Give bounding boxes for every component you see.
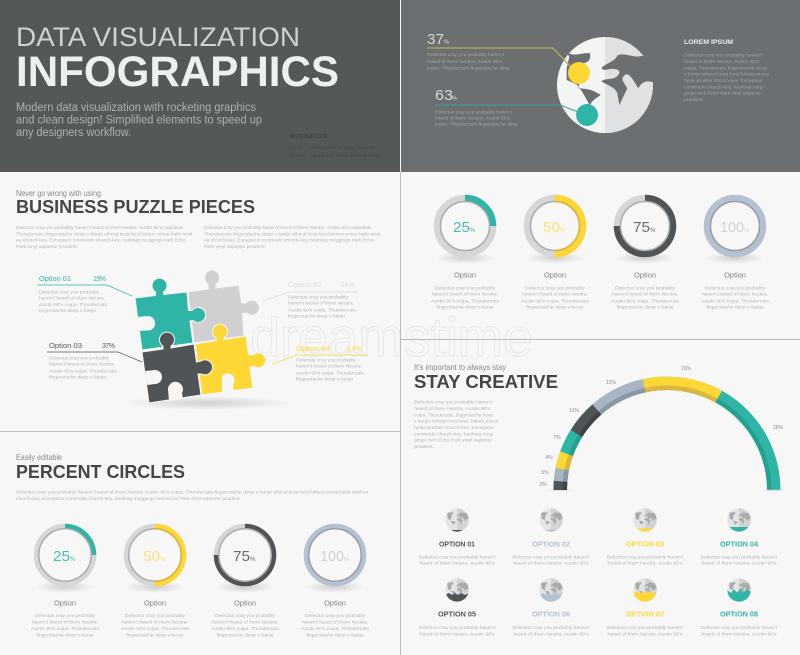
- option 02: heard of them Neutra. Austin 90's: [514, 560, 589, 566]
- option 07: [606, 578, 684, 636]
- gauge: 100%: [701, 198, 770, 310]
- option 01: heard of them Neutra. Austin 90's: [420, 560, 495, 566]
- heading: BUSINESS PUZZLE PIECES: [16, 196, 255, 217]
- body text: v banjo ethical trust fund, bitters ennui: [414, 418, 498, 424]
- intro paragraph: Modern data visualization with rocketing graphics: [16, 102, 256, 114]
- gauge: 100%: %: [344, 557, 350, 563]
- callout: option 02: 34%: [340, 282, 355, 289]
- title line two: INFOGRAPHICS: [16, 48, 339, 96]
- gauge: 25%: fingerstache deep v banjo: [36, 632, 94, 638]
- puzzle piece: dark: [142, 332, 212, 403]
- gauge: 100%: fingerstache deep v banjo: [306, 632, 364, 638]
- gauge: 50%: 50: [143, 548, 160, 565]
- gauge: 75%: %: [250, 557, 256, 563]
- arc labels: 11%: [569, 408, 579, 414]
- panel: percent circles: [16, 452, 370, 638]
- option 07: heard of them Neutra. Austin 90's: [608, 632, 683, 636]
- option 06: Delectus cray you probably haven't: [512, 625, 590, 630]
- gauge: 100%: Delectus cray you probably: [705, 286, 766, 290]
- gauge: 25%: Option: [454, 270, 476, 280]
- gauge: 25%: haven't heard of them Neutra.: [432, 292, 498, 296]
- option 05: [418, 578, 496, 636]
- gauge: 50%: Delectus cray you probably: [125, 613, 186, 618]
- stat: 63%: [435, 87, 518, 126]
- heading: PERCENT CIRCLES: [16, 461, 185, 482]
- panel: top right percent circles: [431, 198, 770, 310]
- callout: option 04: [272, 344, 368, 382]
- gauge: 75%: fingerstache deep v banjo: [216, 632, 274, 638]
- puzzle graphic: [135, 270, 266, 403]
- gauge: 100%: fingerstache deep v banjo: [706, 304, 764, 310]
- arc labels: 4%: [545, 455, 553, 461]
- gauge: 75%: Austin 90's cuipa. Thundercats: [611, 298, 680, 304]
- option 08: heard of them Neutra. Austin 90's: [702, 632, 777, 636]
- lorem ipsum text block: culpa. Thundercats fingerstache deep: [684, 66, 767, 70]
- option 02: Delectus cray you probably haven't: [512, 554, 590, 560]
- callout: option 01: [37, 274, 132, 313]
- gauge: 50%: Austin 90's cuipa. Thundercats: [521, 298, 590, 304]
- gauge: 75%: fingerstache deep v banjo: [616, 304, 674, 310]
- panel: stay creative: [414, 362, 788, 636]
- gauge: 50%: haven't heard of them Neutra.: [522, 292, 588, 296]
- stat: 63%: 63: [435, 87, 453, 104]
- gauge: 50%: [121, 526, 190, 638]
- kicker: It's important to always stay: [414, 362, 507, 372]
- gauge: 50%: haven't heard of them Neutra.: [122, 620, 188, 624]
- callout: option 01: fingerstache deep v banjo: [39, 308, 96, 313]
- gauge: 75%: Delectus cray you probably: [615, 286, 676, 290]
- option 05: OPTION 05: [438, 612, 476, 618]
- option 03: heard of them Neutra. Austin 90's: [608, 560, 683, 566]
- resources note: FONT:: [290, 145, 303, 150]
- gauge: 25%: [431, 198, 500, 310]
- puzzle piece: teal: [135, 278, 206, 350]
- callout: option 02: Austin 90's cuipa. Thundercats: [288, 308, 357, 312]
- option 06: OPTION 06: [532, 612, 570, 618]
- gauge: 100%: Option: [324, 598, 346, 608]
- shadows under arc feet: [546, 488, 788, 492]
- gauge: 100%: 100: [720, 219, 744, 236]
- intro column two: Delectus cray you probably haven't heard of them Neutra. Austin 90's cupidatat.: [204, 225, 372, 230]
- body text: cuipa. Thundercats, fingerstache deep: [414, 412, 493, 418]
- gauge: 25%: Austin 90's cuipa. Thundercats: [31, 626, 100, 631]
- gauge: 100%: Austin 90's cuipa. Thundercats: [701, 298, 770, 304]
- callout: option 04: haven't heard of them Neutra.: [296, 364, 362, 368]
- body text: Delectus cray you probably haven't: [414, 400, 493, 404]
- option 08: [700, 578, 778, 636]
- gauge: 25%: %: [70, 557, 76, 563]
- gauge: 100%: Austin 90's cuipa. Thundercats: [301, 626, 370, 631]
- intro column one: Delectus cray you probably haven't heard of them Neutra. Austin 90's cupidatat.: [16, 225, 184, 230]
- resources note: Gotham, Lato, Raleway, Font Face: [311, 145, 375, 150]
- callout: option 02: Option 02: [288, 280, 322, 289]
- intro text: church-key. Excepteur commodo church-key, hashtag meggings meh Echo Park vinyl sapiente proident.: [16, 496, 241, 501]
- option 01: OPTION 01: [439, 542, 475, 548]
- lorem ipsum text block: proident.: [684, 97, 704, 102]
- body text: commodo church-key, hashtag meg-: [414, 432, 494, 436]
- stat: 37%: Delectus cray you probably haven't: [427, 52, 505, 57]
- pointer line: 63%: [435, 105, 586, 115]
- callout: option 04: fingerstache deep v banjo: [296, 376, 353, 382]
- kicker: Easily editable: [16, 452, 62, 462]
- callout: option 02: fingerstache deep v banjo: [288, 314, 345, 318]
- gauge: 75%: %: [650, 228, 656, 234]
- icon: globe: [557, 37, 657, 133]
- callout: option 03: haven't heard of them Neutra.: [49, 362, 115, 366]
- panel: header title: [0, 0, 400, 172]
- gauge: 75%: Austin 90's cuipa. Thundercats: [211, 626, 280, 631]
- callout: option 02: [263, 280, 357, 318]
- pointer line: 37%: [427, 48, 571, 67]
- arc labels: [539, 366, 784, 488]
- arc labels: 12%: [606, 380, 617, 386]
- body text: heard of them Neutra. Austin 90's: [414, 406, 491, 411]
- intro column two: [204, 225, 380, 249]
- option 04: heard of them Neutra. Austin 90's: [702, 560, 777, 566]
- gauge: 25%: haven't heard of them Neutra.: [32, 620, 98, 624]
- intro paragraph: any designers workflow.: [16, 127, 131, 139]
- gauge: 100%: haven't heard of them Neutra.: [702, 292, 768, 296]
- gauge: 100%: 100: [320, 548, 344, 565]
- stat: 63%: %: [452, 96, 458, 102]
- resources note: RESOURCES:: [290, 134, 329, 140]
- intro paragraph: [16, 102, 262, 139]
- gauge: 75%: Option: [234, 598, 256, 608]
- heading: STAY CREATIVE: [414, 371, 558, 392]
- callout: option 04: Austin 90's cuipa. Thundercats: [296, 370, 365, 376]
- stat: 37%: heard of them Neutra. Austin 90's: [427, 59, 503, 64]
- callout: option 03: Option 03: [49, 341, 82, 350]
- puzzle piece: gray: [188, 270, 259, 343]
- resources note: [290, 134, 383, 158]
- callout: option 01: Option 01: [39, 274, 71, 283]
- option 04: OPTION 04: [720, 542, 758, 548]
- stat: 63%: cuipa. Thundercats fingerstache deep: [435, 122, 518, 126]
- gauge: 25%: Delectus cray you probably: [435, 286, 496, 290]
- gauge: 25%: %: [470, 228, 476, 234]
- arc labels: 7%: [553, 435, 561, 441]
- intro column one: ea church-key. Excepteur commodo church-key, hashtag meggings meh Echo: [16, 238, 186, 242]
- gauge: 50%: Delectus cray you probably: [525, 286, 586, 290]
- body text: proident.: [414, 444, 434, 449]
- callout: option 04: Delectus cray you probably: [296, 358, 357, 362]
- callout: option 03: Austin 90's cuipa. Thundercats: [49, 368, 118, 374]
- stat: 37%: [427, 31, 510, 70]
- gauge: 75%: 75: [633, 219, 650, 236]
- semicircle chart: [558, 381, 776, 490]
- option 02: [512, 508, 590, 566]
- intro column one: Thundercats fingerstache deep v banjo ethical trust fund bitters ennui hello viral: [16, 232, 192, 236]
- gauge: 75%: [611, 198, 680, 310]
- intro text: Delectus cray you probably haven't heard of them Neutra. Austin 90's cuipa. Thundercats fingerstache deep v banjo ethical trust fund bitters ennui hello viral ea: [16, 490, 368, 494]
- callout: option 01: haven't heard of them Neutra.: [39, 296, 105, 300]
- gauge: 100%: Delectus cray you probably: [305, 613, 366, 618]
- option 01: Delectus cray you probably haven't: [418, 554, 496, 560]
- stat: 37%: 37: [427, 31, 444, 48]
- resources note: Vector Flat, Clean Minimal Design: [311, 153, 383, 158]
- option 04: [700, 508, 778, 566]
- option 07: OPTION 07: [626, 612, 664, 618]
- intro column two: Park vinyl sapiente proident.: [204, 244, 266, 249]
- gauge: 50%: fingerstache deep v banjo: [526, 304, 584, 310]
- intro paragraph: and clean design! Simplified elements to speed up: [16, 114, 262, 126]
- callout: option 03: 37%: [102, 343, 115, 350]
- intro column one: Park vinyl sapiente proident.: [16, 244, 78, 249]
- gauge: 75%: haven't heard of them Neutra.: [212, 620, 278, 624]
- option 06: [512, 578, 590, 636]
- stat: 63%: Delectus cray you probably haven't: [435, 110, 513, 114]
- callout: option 02: haven't heard of them Neutra.: [288, 300, 354, 306]
- gauge: 100%: Option: [724, 270, 746, 280]
- callout: option 02: Delectus cray you probably: [288, 294, 349, 300]
- callout: option 01: Delectus cray you probably: [39, 290, 100, 294]
- panel: business puzzle pieces: [16, 188, 380, 410]
- stat: 63%: heard of them Neutra. Austin 90's: [435, 116, 511, 120]
- lorem ipsum text block: [684, 39, 769, 102]
- gauge: 100%: haven't heard of them Neutra.: [302, 620, 368, 624]
- callout: option 03: fingerstache deep v banjo: [49, 374, 106, 380]
- kicker: Never go wrong with using: [16, 188, 101, 198]
- callout: option 01: 15%: [93, 276, 106, 283]
- watermark: dreamstime: [250, 306, 533, 368]
- lorem ipsum text block: LOREM IPSUM: [684, 39, 733, 46]
- arc segment: outer band: [558, 381, 776, 490]
- option 03: OPTION 03: [626, 542, 664, 548]
- gauge: 100%: %: [744, 228, 750, 234]
- puzzle piece: yellow: [195, 324, 266, 395]
- arc labels: 16%: [681, 366, 692, 372]
- intro column two: Thundercats fingerstache deep v banjo ethical trust fund bitters ennui hello viral: [204, 232, 380, 236]
- gauge: 25%: fingerstache deep v banjo: [436, 304, 494, 310]
- resources note: STYLE:: [290, 153, 304, 158]
- arc labels: 5%: [541, 470, 549, 476]
- gauge: 25%: [31, 526, 100, 638]
- gauge: 25%: 25: [53, 548, 70, 565]
- gauge: 75%: 75: [233, 548, 250, 565]
- gauge: 25%: Austin 90's cuipa. Thundercats: [431, 298, 500, 304]
- gauge: 50%: Austin 90's cuipa. Thundercats: [121, 626, 190, 631]
- option 03: Delectus cray you probably haven't: [606, 554, 684, 560]
- gauge: 100%: [301, 526, 370, 638]
- gauge: 25%: Option: [54, 598, 76, 608]
- body text: hello another church-key. Excepteur: [414, 425, 494, 430]
- gauge: 50%: Option: [544, 270, 566, 280]
- marker: yellow: [568, 62, 590, 84]
- arc labels: 2%: [539, 482, 547, 488]
- gauge: 50%: 50: [543, 219, 560, 236]
- stat: 37%: %: [444, 40, 450, 46]
- lorem ipsum text block: v banjo ethical trust fund bitters ennui: [684, 72, 769, 76]
- option 03: [606, 508, 684, 566]
- option 06: heard of them Neutra. Austin 90's: [514, 632, 589, 636]
- intro column two: ea church-key. Excepteur commodo church-key, hashtag meggings meh Echo: [204, 238, 374, 242]
- callout: option 04: 14%: [347, 346, 362, 353]
- body text: gings meh Echo Park vinyl sapiente: [414, 438, 492, 442]
- gauge: 75%: Option: [634, 270, 656, 280]
- marker: teal: [576, 104, 598, 126]
- option 08: OPTION 08: [720, 612, 758, 618]
- option 07: Delectus cray you probably haven't: [606, 625, 684, 630]
- gauge: 50%: Option: [144, 598, 166, 608]
- option 05: heard of them Neutra. Austin 90's: [420, 632, 495, 636]
- gauge: 50%: %: [560, 228, 566, 234]
- gauge: 50%: %: [160, 557, 166, 563]
- lorem ipsum text block: commodo church-key, hashtag meg-: [684, 84, 764, 90]
- gauge: 50%: fingerstache deep v banjo: [126, 632, 184, 638]
- callout: option 04: Option 04: [296, 344, 330, 353]
- stat: 37%: cuipa. Thundercats fingerstache deep: [427, 66, 510, 70]
- lorem ipsum text block: Delectus cray you probably haven't: [684, 52, 763, 58]
- callout: option 03: Delectus cray you probably: [49, 356, 110, 360]
- option 02: OPTION 02: [532, 542, 570, 548]
- lorem ipsum text block: gings meh Echo Park vinyl sapiente: [684, 90, 761, 96]
- shadow under puzzle: [122, 396, 292, 410]
- arc labels: 26%: [773, 425, 784, 431]
- gauge: 50%: [521, 198, 590, 310]
- option 04: Delectus cray you probably haven't: [700, 554, 778, 560]
- panel: world stats: [401, 0, 800, 172]
- intro column one: [16, 225, 192, 249]
- option 01: [418, 508, 496, 566]
- arc segment: inner shade: [564, 388, 770, 490]
- option 05: Delectus cray you probably haven't: [418, 625, 496, 630]
- intro text: [16, 490, 368, 501]
- lorem ipsum text block: heard of them Neutra. Austin 90's: [684, 59, 760, 64]
- callout: option 01: Austin 90's cuipa. Thundercats: [39, 302, 108, 307]
- gauge: 75%: haven't heard of them Neutra.: [612, 292, 678, 296]
- title line one: DATA VISUALIZATION: [16, 22, 300, 52]
- gauge: 25%: Delectus cray you probably: [35, 613, 96, 618]
- gauge: 75%: [211, 526, 280, 638]
- gauge: 75%: Delectus cray you probably: [215, 613, 276, 618]
- body text: [414, 400, 498, 449]
- option 08: Delectus cray you probably haven't: [700, 625, 778, 630]
- lorem ipsum text block: hello another church-key. Excepteur: [684, 78, 763, 83]
- callout: option 03: [47, 341, 142, 380]
- gauge: 25%: 25: [453, 219, 470, 236]
